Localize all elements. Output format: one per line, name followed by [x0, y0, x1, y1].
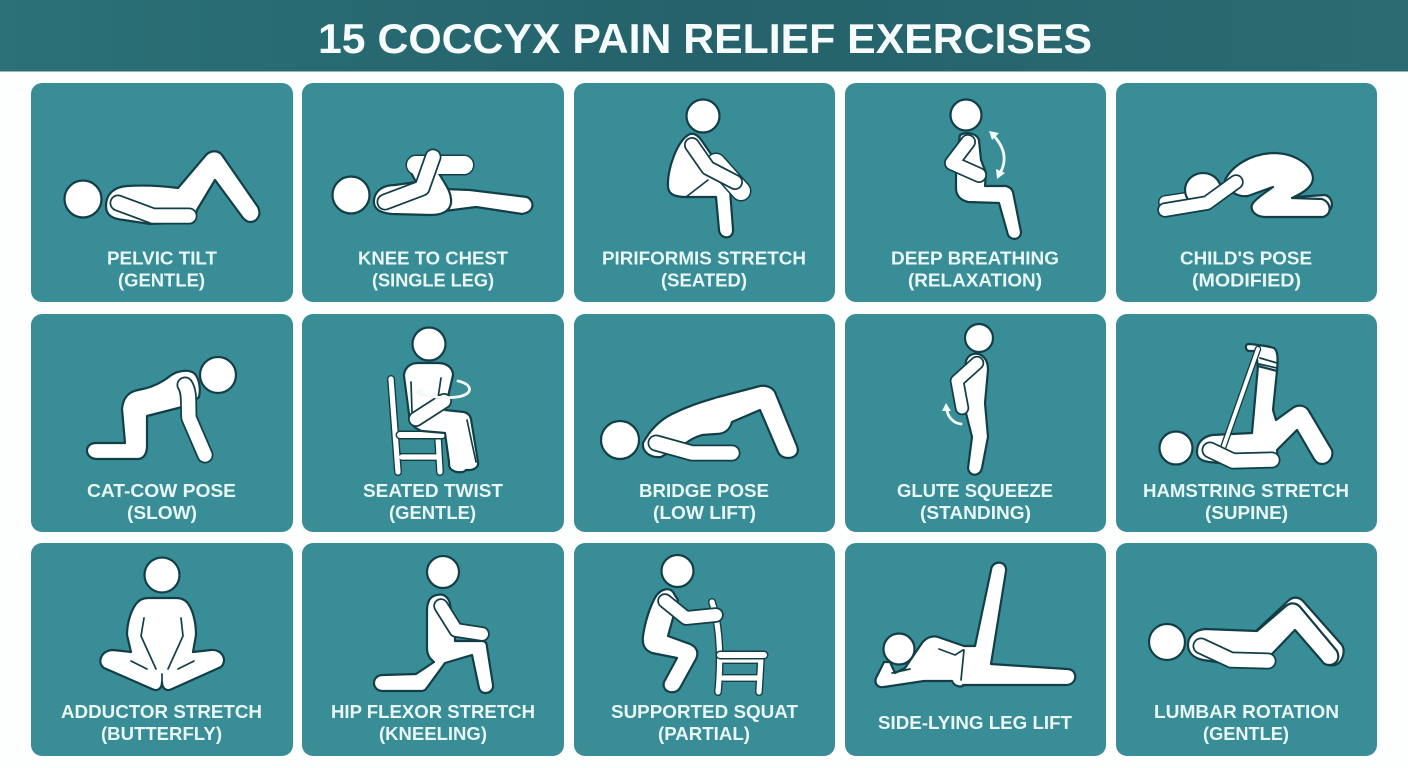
- label: DEEP BREATHING: [891, 248, 1059, 268]
- label: [1143, 481, 1349, 523]
- label: (LOW LIFT): [653, 503, 756, 523]
- label: [87, 481, 236, 523]
- icon: chair: [391, 379, 442, 472]
- panel: hamstring stretch: [1116, 314, 1377, 532]
- icon: bridge pose figure: [601, 386, 798, 459]
- arrow: breathing: [989, 131, 1005, 179]
- label: HIP FLEXOR STRETCH: [331, 702, 535, 722]
- label: [358, 248, 508, 290]
- panel: side-lying leg lift: [845, 543, 1106, 756]
- icon: hamstring stretch figure: [1160, 344, 1332, 464]
- panel: glute squeeze: [845, 314, 1106, 532]
- title banner: [0, 0, 1408, 72]
- label: GLUTE SQUEEZE: [897, 481, 1053, 501]
- panel: supported squat: [574, 543, 835, 756]
- label: CAT-COW POSE: [87, 481, 236, 501]
- panel: seated twist: [302, 314, 564, 532]
- label: [61, 702, 262, 744]
- panel: child's pose: [1116, 83, 1377, 302]
- label: (PARTIAL): [658, 724, 750, 744]
- label: [331, 702, 535, 744]
- icon: glute squeeze figure: [942, 324, 993, 475]
- label: HAMSTRING STRETCH: [1143, 481, 1349, 501]
- label: (MODIFIED): [1192, 270, 1301, 290]
- label: (SLOW): [127, 503, 197, 523]
- panel: pelvic tilt: [31, 83, 293, 302]
- panel: piriformis stretch: [574, 83, 835, 302]
- label: (SUPINE): [1205, 503, 1288, 523]
- label: [611, 702, 798, 744]
- label: PIRIFORMIS STRETCH: [602, 248, 806, 268]
- title: 15 COCCYX PAIN RELIEF EXERCISES: [318, 15, 1092, 62]
- label: SEATED TWIST: [363, 481, 503, 501]
- label: PELVIC TILT: [107, 248, 217, 268]
- label: CHILD'S POSE: [1180, 248, 1312, 268]
- panel: deep breathing: [845, 83, 1106, 302]
- icon: lumbar rotation figure: [1149, 598, 1344, 665]
- label: LUMBAR ROTATION: [1154, 702, 1339, 722]
- icon: piriformis stretch figure: [668, 100, 741, 237]
- panel: lumbar rotation: [1116, 543, 1377, 756]
- icon: child's pose figure: [1165, 153, 1332, 217]
- panel: hip flexor stretch: [302, 543, 564, 756]
- icon: side-lying leg lift figure: [875, 563, 1075, 687]
- icon: knee to chest figure: [332, 157, 532, 215]
- label: [639, 481, 769, 523]
- label: (SEATED): [661, 270, 747, 290]
- icon: supported squat figure: [643, 555, 764, 692]
- label: SIDE-LYING LEG LIFT: [878, 713, 1072, 733]
- label: (KNEELING): [379, 724, 487, 744]
- icon: hip flexor figure: [374, 556, 493, 693]
- label: [363, 481, 503, 523]
- label: [897, 481, 1053, 523]
- label: KNEE TO CHEST: [358, 248, 508, 268]
- label: (SINGLE LEG): [372, 270, 494, 290]
- label: (BUTTERFLY): [101, 724, 222, 744]
- arrow: rotation: [414, 381, 470, 398]
- label: [107, 248, 217, 290]
- label: ADDUCTOR STRETCH: [61, 702, 262, 722]
- icon: seated twist figure: [391, 328, 478, 472]
- icon: deep breathing figure: [950, 100, 1021, 239]
- panel: cat-cow pose: [31, 314, 293, 532]
- label: (GENTLE): [389, 503, 476, 523]
- icon: butterfly figure: [100, 558, 224, 690]
- label: (STANDING): [920, 503, 1031, 523]
- label: [602, 248, 806, 290]
- label: (GENTLE): [118, 270, 205, 290]
- icon: pelvic tilt figure: [64, 151, 259, 224]
- label: [1154, 702, 1339, 744]
- label: (GENTLE): [1203, 724, 1289, 744]
- panel: bridge pose: [574, 314, 835, 532]
- label: [1180, 248, 1312, 290]
- arrow: glute squeeze: [942, 403, 961, 424]
- label: [891, 248, 1059, 290]
- icon: chair: [712, 602, 764, 692]
- label: SUPPORTED SQUAT: [611, 702, 798, 722]
- label: (RELAXATION): [908, 270, 1042, 290]
- panel: knee to chest: [302, 83, 564, 302]
- label: BRIDGE POSE: [639, 481, 769, 501]
- panel: adductor stretch: [31, 543, 293, 756]
- icon: cat-cow figure: [87, 357, 236, 459]
